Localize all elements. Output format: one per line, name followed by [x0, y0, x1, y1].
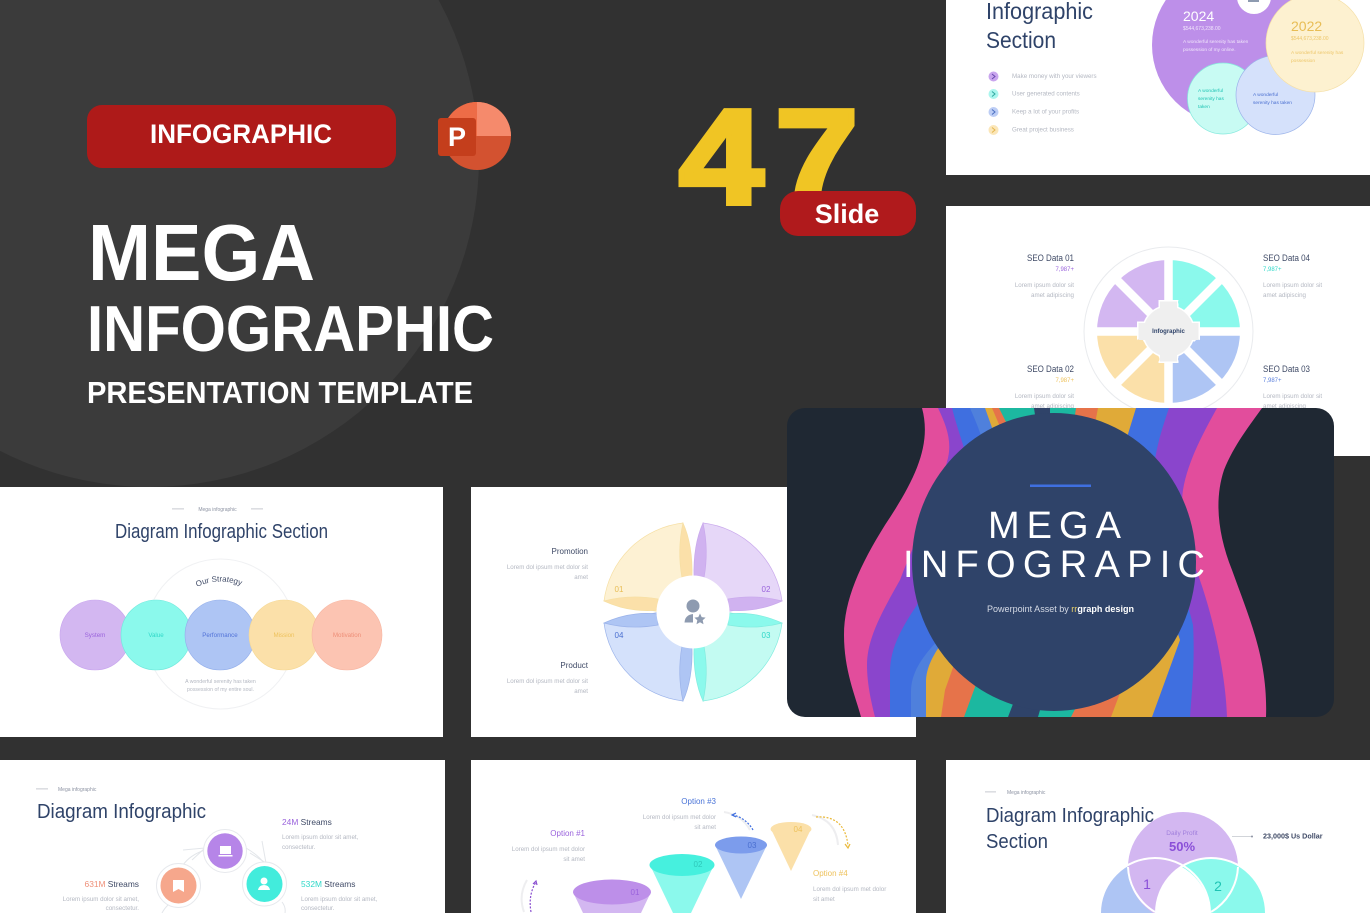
header tag — [985, 790, 1046, 796]
stream labels: Lorem ipsum dolor sit amet, — [282, 834, 359, 841]
seo data labels: SEO Data 04 — [1263, 253, 1310, 263]
seo data labels: Lorem ipsum dolor sit — [1015, 393, 1074, 400]
stream labels: 24M Streams — [282, 817, 332, 827]
icon: powerpoint logo — [438, 102, 511, 170]
petal labels: Lorem dol ipsum met dolor sit — [507, 678, 588, 685]
badge: infographic — [87, 105, 396, 168]
venn circles: serenity has taken — [1253, 100, 1292, 106]
badge: slide: Slide — [815, 199, 879, 229]
seo data labels: amet adipiscing — [1263, 403, 1307, 410]
option labels: Option #3 — [681, 797, 717, 806]
header tag — [36, 787, 97, 793]
option labels: sit amet — [813, 896, 835, 903]
stream labels — [63, 817, 378, 912]
venn circles: A wonderful serenity has taken — [1183, 39, 1249, 45]
main title: PRESENTATION TEMPLATE — [87, 375, 473, 410]
seo data labels: SEO Data 01 — [1027, 253, 1074, 263]
petal labels: Product — [560, 661, 589, 670]
panel: seo data wheel — [946, 206, 1370, 456]
arrow: purple — [522, 880, 537, 912]
cone 1: 01 — [631, 888, 640, 897]
stream labels: consectetur. — [106, 905, 139, 912]
option labels: Lorem dol ipsum met dolor — [512, 846, 585, 853]
cover title: MEGA — [988, 505, 1122, 547]
node: teal people — [242, 862, 286, 906]
petal labels: amet — [574, 688, 588, 695]
option labels: Lorem dol ipsum met dolor — [813, 886, 886, 893]
main title: INFOGRAPHIC — [87, 292, 494, 365]
option labels: sit amet — [694, 824, 716, 831]
venn circles: serenity has — [1198, 96, 1224, 102]
header tag: Mega infographic — [198, 507, 237, 513]
venn diagram — [1100, 812, 1266, 913]
strategy diagram: possession of my entire soul. — [187, 687, 254, 693]
venn circles: $544,673,238.00 — [1291, 36, 1329, 42]
stream labels: 532M Streams — [301, 879, 355, 889]
cone 3: 03 — [748, 841, 757, 850]
cone 4: 04 — [794, 825, 803, 834]
petal labels: amet — [574, 574, 588, 581]
wheel diagram — [1084, 247, 1253, 416]
petals — [604, 523, 782, 701]
strategy diagram: Value — [148, 632, 164, 639]
strategy diagram: A wonderful serenity has taken — [185, 679, 256, 685]
heading: Section — [986, 831, 1048, 853]
heading: Diagram Infographic Section — [115, 521, 328, 543]
seo data labels: 7,987+ — [1263, 267, 1282, 273]
seo data labels — [1015, 253, 1322, 410]
seo data labels: Lorem ipsum dolor sit — [1015, 282, 1074, 289]
header tag: Mega infographic — [1007, 790, 1046, 796]
node: purple laptop — [204, 830, 246, 872]
venn diagram: 50% — [1169, 839, 1195, 854]
strategy diagram — [60, 558, 382, 710]
venn circles: $544,673,238.00 — [1183, 26, 1221, 32]
node: orange bookmark — [156, 864, 200, 908]
petal numbers — [615, 585, 771, 640]
strategy diagram: Motivation — [333, 632, 362, 639]
venn circles: A wonderful — [1198, 88, 1223, 94]
cover title: INFOGRAPIC — [903, 544, 1205, 586]
main title — [87, 208, 494, 410]
bullet list: User generated contents — [1012, 90, 1080, 98]
seo data labels: SEO Data 02 — [1027, 364, 1074, 374]
header tag — [172, 507, 263, 513]
petal labels: Promotion — [552, 547, 588, 556]
venn diagram: Daily Profit — [1166, 830, 1198, 837]
stream labels: 631M Streams — [85, 879, 139, 889]
cover subtitle: Powerpoint Asset by rrgraph design — [987, 604, 1134, 615]
petal numbers: 02 — [762, 585, 771, 594]
center icon — [656, 576, 730, 648]
seo data labels: Lorem ipsum dolor sit — [1263, 393, 1322, 400]
petal labels: Lorem dol ipsum met dolor sit — [507, 564, 588, 571]
cone 3 — [715, 836, 767, 899]
venn diagram: 1 — [1143, 876, 1151, 892]
slide count: 47 — [679, 82, 858, 233]
wheel diagram: Infographic — [1152, 329, 1185, 335]
stream labels: consectetur. — [282, 844, 316, 851]
venn circles: 2024 — [1183, 8, 1214, 24]
seo data labels: 7,987+ — [1055, 378, 1074, 384]
cycle arrows — [162, 841, 285, 913]
strategy diagram: System — [85, 632, 105, 639]
panel: mega infographic cover card — [787, 408, 1334, 717]
badge: slide — [780, 191, 916, 236]
header tag: Mega infographic — [58, 787, 97, 793]
cone 2 — [650, 854, 714, 913]
seo data labels: amet adipiscing — [1263, 292, 1307, 299]
option labels — [512, 797, 886, 903]
strategy diagram: Performance — [202, 632, 238, 639]
stream labels: Lorem ipsum dolor sit amet, — [301, 896, 378, 903]
heading: Diagram Infographic — [37, 801, 206, 823]
callout — [1232, 832, 1323, 840]
bullet list: Make money with your viewers — [1012, 73, 1097, 80]
venn diagram: 2 — [1214, 878, 1222, 894]
bullet list — [988, 72, 1097, 135]
bullet list: Great project business — [1012, 126, 1074, 134]
panel: infographic section with overlapping circles — [946, 0, 1370, 175]
venn circles: 2022 — [1291, 18, 1322, 34]
venn circles: A wonderful — [1253, 92, 1278, 98]
cone 4 — [770, 822, 812, 871]
petal labels — [507, 547, 589, 695]
cover title — [903, 505, 1205, 586]
venn circles: possession — [1291, 58, 1315, 64]
bullet list: Keep a lot of your profits — [1012, 108, 1079, 116]
heading — [986, 805, 1154, 853]
option labels: Lorem dol ipsum met dolor — [643, 814, 716, 821]
heading: Section — [986, 27, 1056, 53]
venn circles: taken — [1198, 104, 1210, 110]
venn circles: possession of my online. — [1183, 47, 1236, 53]
badge: infographic: INFOGRAPHIC — [150, 119, 332, 149]
strategy diagram: Our Strategy — [196, 576, 242, 586]
arrow: yellow — [812, 815, 850, 848]
cone 1 — [573, 880, 651, 913]
option labels: Option #1 — [550, 829, 586, 838]
panel: cone options — [471, 760, 916, 913]
stream labels: Lorem ipsum dolor sit amet, — [63, 896, 139, 903]
heading — [987, 2, 1092, 48]
petal numbers: 04 — [615, 631, 624, 640]
strategy diagram: Mission — [274, 632, 295, 639]
main title: MEGA — [88, 208, 315, 297]
cone 2: 02 — [694, 860, 703, 869]
panel: four petal diagram — [471, 487, 916, 737]
panel: our strategy circles — [0, 487, 443, 737]
center circle — [912, 413, 1196, 711]
venn circles: A wonderful serenity has — [1291, 50, 1344, 56]
seo data labels: 7,987+ — [1263, 378, 1282, 384]
petal numbers: 03 — [762, 631, 771, 640]
venn circles — [1152, 0, 1364, 134]
seo data labels: SEO Data 03 — [1263, 364, 1310, 374]
panel: venn daily profit — [946, 760, 1370, 913]
panel: streams cycle diagram — [0, 760, 445, 913]
seo data labels: amet adipiscing — [1031, 403, 1075, 410]
option labels: sit amet — [563, 856, 585, 863]
stream labels: consectetur. — [301, 905, 335, 912]
petal numbers: 01 — [615, 585, 624, 594]
seo data labels: amet adipiscing — [1031, 292, 1075, 299]
slide count: 47: 7 — [775, 82, 858, 233]
seo data labels: Lorem ipsum dolor sit — [1263, 282, 1322, 289]
heading: Diagram Infographic — [986, 805, 1154, 827]
option labels: Option #4 — [813, 869, 848, 878]
arrow: blue — [724, 812, 753, 830]
accent line — [1030, 484, 1091, 487]
seo data labels: 7,987+ — [1055, 267, 1074, 273]
icon: powerpoint logo: P — [448, 122, 466, 152]
callout: 23,000$ Us Dollar — [1263, 832, 1323, 840]
wavy colour bands — [844, 408, 1266, 717]
slide count: 47: 4 — [679, 82, 764, 233]
